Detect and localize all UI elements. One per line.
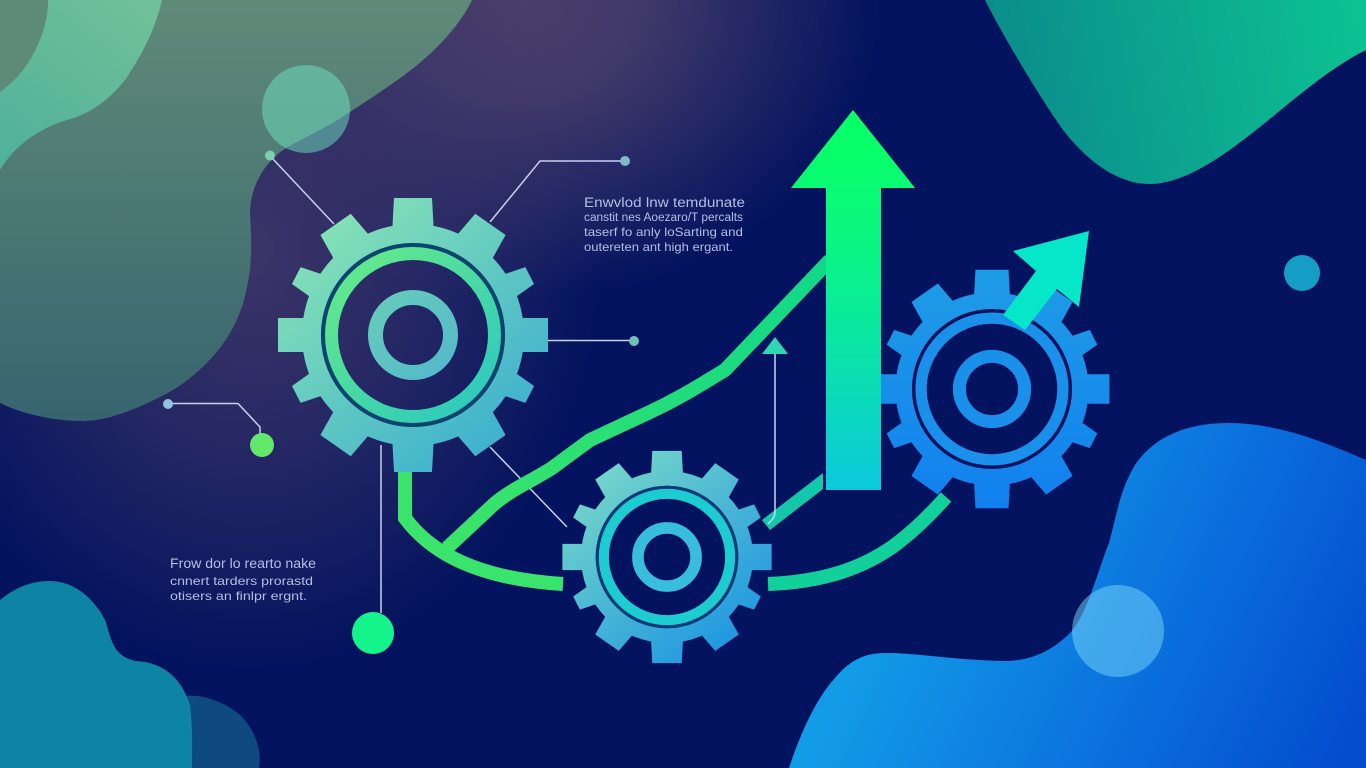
curve: lower trend segment	[762, 473, 823, 530]
circle: bottom-right translucent	[1072, 585, 1164, 677]
gear green ring	[332, 254, 494, 416]
arrow: large upward green	[791, 110, 915, 490]
gear: medium teal	[562, 450, 772, 664]
blob: top-left green	[0, 0, 472, 421]
dot: right	[629, 336, 639, 346]
gear teal ring	[604, 494, 730, 620]
dot: green small	[250, 433, 274, 457]
blob: rear dark shape	[180, 696, 260, 768]
curve: gear one to gear two	[405, 465, 563, 584]
gear: blue	[881, 270, 1110, 508]
gear dark ring	[323, 245, 503, 425]
circle: top-left translucent	[262, 65, 350, 153]
connector: gear to gear	[490, 447, 567, 527]
connector: right of gear	[548, 340, 630, 342]
text block: lower callout: otisers an finlpr ergnt.	[170, 589, 307, 603]
blob: large muted green shape	[0, 0, 472, 421]
gear body with teeth	[278, 198, 548, 472]
text block: upper callout: outereten ant high ergant.	[584, 240, 733, 254]
gear: large green	[278, 198, 548, 472]
connector: top-right elbow	[490, 161, 621, 222]
text block: upper callout: Enwvlod lnw temdunate	[584, 195, 745, 210]
connector: top-left to gear	[272, 158, 334, 224]
blob: bottom-left teal pair	[0, 581, 260, 768]
blob: light green band	[0, 0, 162, 170]
gear hub ring	[638, 528, 696, 586]
connector: left elbow	[172, 404, 260, 434]
arrow: diagonal teal	[1003, 231, 1089, 330]
connector: vertical to green dot	[380, 445, 382, 613]
node dots	[163, 150, 639, 654]
arrow head	[762, 337, 788, 354]
blob: inner corner shape	[0, 0, 48, 92]
curve: gear two to gear three	[768, 497, 946, 584]
dot: top-right	[620, 156, 630, 166]
text block: lower callout: cnnert tarders prorastd	[170, 574, 313, 588]
gear hub ring	[376, 298, 450, 372]
circle: right small teal	[1284, 255, 1320, 291]
gear body with teeth	[881, 270, 1110, 508]
dot: top-left	[265, 150, 275, 160]
curve: rising trend line	[447, 260, 830, 548]
blob: bottom-right blue	[789, 423, 1366, 768]
text block: upper callout: taserf fo anly loSarting and	[584, 225, 743, 239]
text block: lower callout: Frow dor lo rearto nake	[170, 556, 316, 571]
dot: green large	[352, 612, 394, 654]
blob: front teal shape	[0, 581, 192, 768]
gear body with teeth	[562, 450, 772, 664]
text block: lower callout	[170, 556, 316, 603]
text block: upper callout	[584, 195, 745, 254]
dot: left	[163, 399, 173, 409]
connector lines	[172, 158, 630, 613]
blob: top-right teal	[985, 0, 1366, 184]
arrow stem	[768, 352, 775, 524]
gear hub ring	[959, 356, 1025, 422]
small indicator arrow	[762, 337, 788, 524]
gear blue ring	[921, 318, 1063, 460]
text block: upper callout: canstit nes Aoezaro/T percalts	[584, 212, 743, 224]
gear dark ring	[597, 487, 737, 627]
growth curves	[405, 260, 946, 584]
